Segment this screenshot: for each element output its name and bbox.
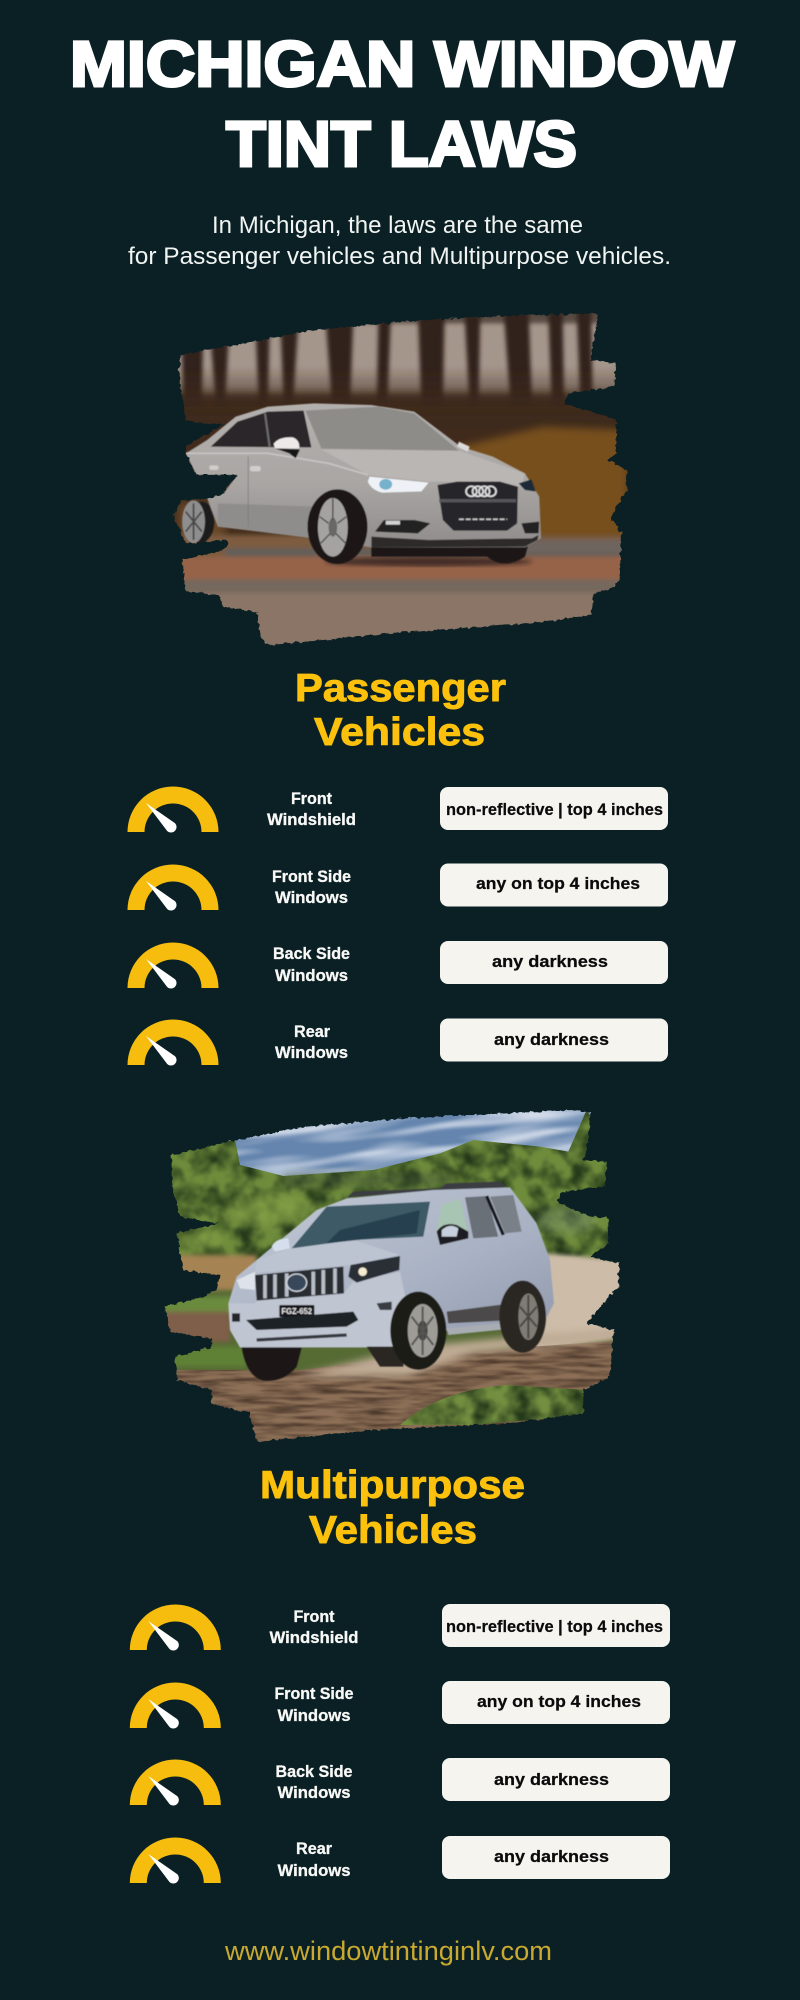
subtitle: In Michigan, the laws are the same: [212, 212, 583, 239]
label: rear windows: [278, 1840, 350, 1880]
value: rear windows: any darkness: [494, 1030, 609, 1049]
label: back side windows: Back Side: [273, 945, 350, 963]
value: front side windows: [442, 1681, 670, 1724]
SUV: [228, 1182, 554, 1381]
label: rear windows: Windows: [275, 1044, 348, 1062]
label: front side windows: [274, 1685, 354, 1725]
title: [70, 28, 735, 180]
table: multipurpose vehicle rules: [130, 1604, 670, 1884]
value: back side windows: [440, 941, 668, 984]
value: rear windows: [440, 1018, 668, 1062]
grass patch: [400, 1385, 587, 1425]
value: front side windows: any on top 4 inches: [477, 1692, 641, 1711]
label: front side windows: Front Side: [272, 868, 351, 886]
trees: [170, 1112, 609, 1260]
gauge icon: [128, 942, 218, 989]
label: front windshield: Front: [294, 1608, 335, 1626]
photo: multipurpose SUV in brush frame: [164, 1110, 620, 1442]
label: rear windows: Rear: [294, 1023, 331, 1041]
value: rear windows: any darkness: [494, 1847, 609, 1866]
label: front windshield: Windshield: [267, 811, 356, 829]
footer website: www.windowtintinginlv.com: [224, 1936, 552, 1966]
gauge icon: [130, 1838, 221, 1884]
value: front side windows: any on top 4 inches: [476, 874, 640, 893]
label: back side windows: Windows: [278, 1784, 350, 1802]
label: front side windows: Windows: [278, 1707, 350, 1725]
subtitle: for Passenger vehicles and Multipurpose vehicles.: [128, 243, 671, 270]
heading: multipurpose vehicles: Vehicles: [309, 1509, 477, 1552]
licence plate: FGZ-652: [281, 1306, 312, 1316]
title: TINT LAWS: [226, 108, 577, 180]
value: rear windows: [442, 1836, 670, 1879]
label: front windshield: [270, 1608, 358, 1647]
label: front windshield: [267, 790, 356, 829]
label: back side windows: Back Side: [276, 1763, 352, 1781]
ground and dust: [153, 1253, 623, 1367]
gauge icon: [130, 1760, 221, 1806]
subtitle: [128, 212, 671, 270]
value: front windshield: [440, 787, 668, 830]
label: front windshield: Windshield: [270, 1629, 358, 1647]
ground: [180, 532, 622, 646]
label: rear windows: Rear: [296, 1840, 333, 1858]
value: front side windows: [440, 864, 668, 906]
label: rear windows: Windows: [278, 1862, 350, 1880]
value: front windshield: non-reflective | top 4 inches: [446, 1617, 663, 1636]
car shadow: [325, 557, 532, 566]
label: rear windows: [275, 1023, 348, 1062]
label: front side windows: Windows: [275, 889, 348, 907]
gauge icon: [128, 864, 218, 911]
heading: passenger vehicles: Vehicles: [314, 711, 485, 754]
title: MICHIGAN WINDOW: [70, 28, 735, 100]
value: front windshield: non-reflective | top 4 inches: [446, 800, 663, 819]
heading: passenger vehicles: Passenger: [295, 667, 506, 710]
sedan: [182, 403, 541, 564]
value: back side windows: [442, 1758, 670, 1801]
heading: passenger vehicles: [295, 667, 506, 754]
photo: passenger car in brush frame: [172, 313, 628, 646]
heading: multipurpose vehicles: Multipurpose: [260, 1464, 525, 1507]
label: back side windows: [276, 1763, 352, 1802]
label: front side windows: Front Side: [274, 1685, 354, 1703]
label: back side windows: [273, 945, 350, 985]
heading: multipurpose vehicles: [260, 1464, 525, 1552]
table: passenger vehicle rules: [128, 786, 668, 1066]
label: back side windows: Windows: [275, 967, 348, 985]
label: front side windows: [272, 868, 351, 907]
forest background: [171, 310, 629, 543]
value: front windshield: [442, 1604, 670, 1647]
label: front windshield: Front: [291, 790, 332, 808]
gauge icon: [128, 1020, 218, 1066]
infographic canvas: [72, 40, 736, 1966]
gauge icon: [130, 1682, 221, 1729]
gauge icon: [130, 1604, 221, 1651]
sky: [227, 1110, 591, 1176]
gauge icon: [128, 786, 218, 833]
value: back side windows: any darkness: [494, 1770, 609, 1789]
value: back side windows: any darkness: [492, 952, 608, 971]
